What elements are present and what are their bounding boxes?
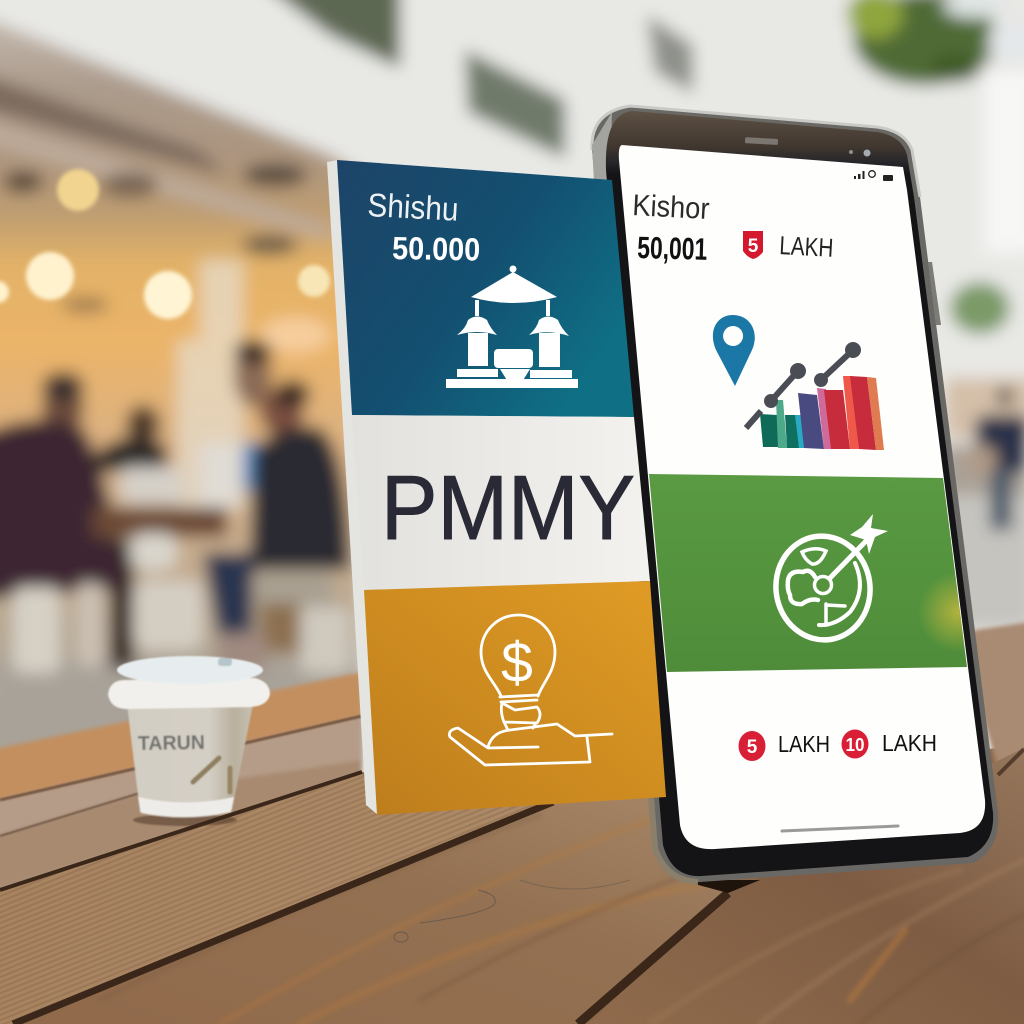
table base: [0, 745, 1024, 1024]
plank with fine stripes: [0, 772, 553, 1024]
title PMMY: PMMY: [381, 458, 635, 559]
plank gaps: [0, 716, 1024, 1024]
bar chart with dumbbells: [746, 342, 884, 450]
side button: [928, 262, 941, 325]
panel: orange: [364, 581, 666, 815]
status icons: [854, 171, 893, 181]
card edge: [327, 160, 378, 815]
panel: blue Shishu: [337, 160, 634, 417]
knot: [394, 880, 630, 942]
knotted plank: [13, 795, 735, 1024]
seated people: [0, 340, 362, 760]
top silver rim: [592, 106, 920, 197]
PMMY card: [327, 160, 666, 815]
amount pills: [738, 730, 937, 761]
amount pills: 5: [747, 737, 758, 758]
phone bezel: [606, 111, 993, 876]
amount 50,001: 50,001: [637, 230, 708, 267]
panel: white PMMY: [352, 415, 650, 590]
left silver side: [592, 112, 612, 182]
icon: bulb on hand: [449, 615, 612, 765]
home indicator: [782, 826, 898, 831]
LAKH label: LAKH: [779, 230, 834, 263]
right plank: [590, 745, 1024, 1024]
right street: [950, 282, 1010, 334]
icon: location pin: [713, 315, 755, 386]
front camera: [849, 150, 870, 156]
icon: market stall: [446, 266, 578, 388]
wooden table: [0, 622, 1024, 1024]
badge 5: [743, 231, 763, 259]
heading Shishu: Shishu: [367, 186, 459, 228]
phone body: [592, 106, 998, 882]
yellow light reflection: [649, 474, 967, 672]
amount 50.000: 50.000: [392, 230, 480, 268]
amount pills: 10: [846, 735, 864, 755]
coffee cup labelled TARUN: [108, 656, 270, 826]
building windows: [258, 0, 400, 68]
heading Kishor: Kishor: [632, 189, 710, 226]
icon: bulb on hand: $: [501, 631, 533, 695]
screen: [619, 145, 985, 849]
speaker: [745, 137, 778, 145]
amount pills: LAKH: [882, 730, 937, 756]
badge 5: 5: [748, 236, 759, 257]
back planks: [0, 622, 1024, 894]
coffee cup labelled TARUN: TARUN: [138, 732, 205, 755]
bronze lower corner: [651, 797, 698, 882]
smartphone: [592, 106, 998, 882]
foliage: [853, 0, 997, 85]
green band: [649, 474, 967, 672]
blurred cafe background: [0, 0, 1024, 790]
amount pills: LAKH: [778, 731, 830, 757]
icon: target and arrow: [769, 514, 888, 646]
cafe lights: [0, 169, 330, 319]
